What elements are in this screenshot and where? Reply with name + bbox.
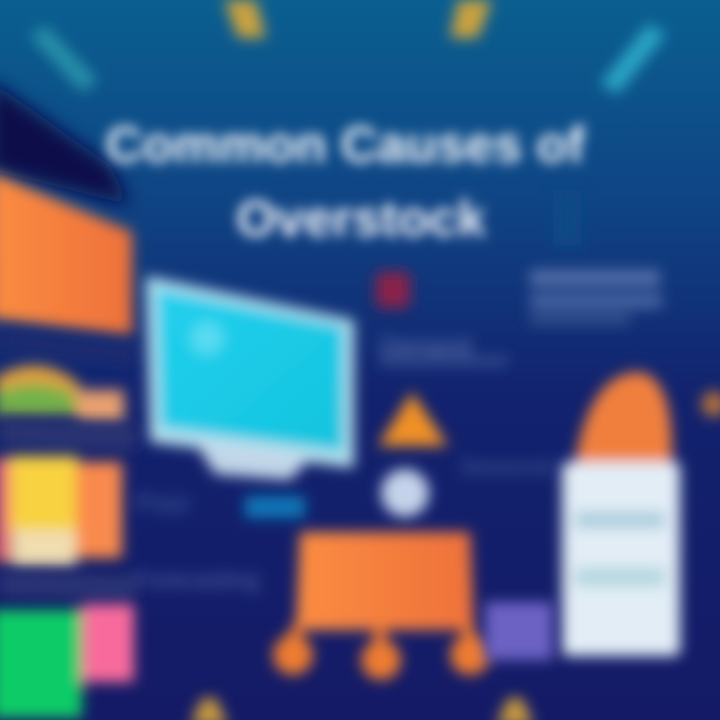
title: Overstock: [236, 190, 486, 247]
gear icon: [381, 469, 429, 517]
monitor caption: Poor: [136, 488, 191, 518]
purple box: [485, 602, 553, 660]
shelf 3 yellow boxes: [0, 456, 122, 566]
shelf plank 3: [0, 572, 135, 598]
left shelves panel: [0, 172, 135, 718]
top accents: [30, 0, 666, 94]
shelf 1 orange boxes: [0, 172, 132, 335]
monitor caption: [134, 488, 305, 594]
orange table: [273, 532, 490, 680]
shelf 2 produce: [0, 366, 124, 422]
warning triangle icon: [378, 392, 448, 446]
shelf plank 1: [0, 330, 135, 365]
title: Common Causes of: [106, 116, 585, 173]
monitor caption: Forecasting: [134, 567, 259, 594]
bottom and side accents: [190, 391, 720, 720]
risk item: red icon and text: [376, 272, 508, 366]
shelf 4 green and pink: [0, 604, 134, 718]
shelf plank 2: [0, 420, 135, 450]
title: [106, 116, 585, 247]
monitor: [146, 276, 354, 480]
risk item: red icon and text: Demand: [380, 333, 471, 360]
triangle caption: Seasonal: [460, 454, 552, 479]
bottle: [562, 372, 680, 656]
dark wedge top left: [0, 80, 130, 205]
right text block: [530, 190, 662, 324]
